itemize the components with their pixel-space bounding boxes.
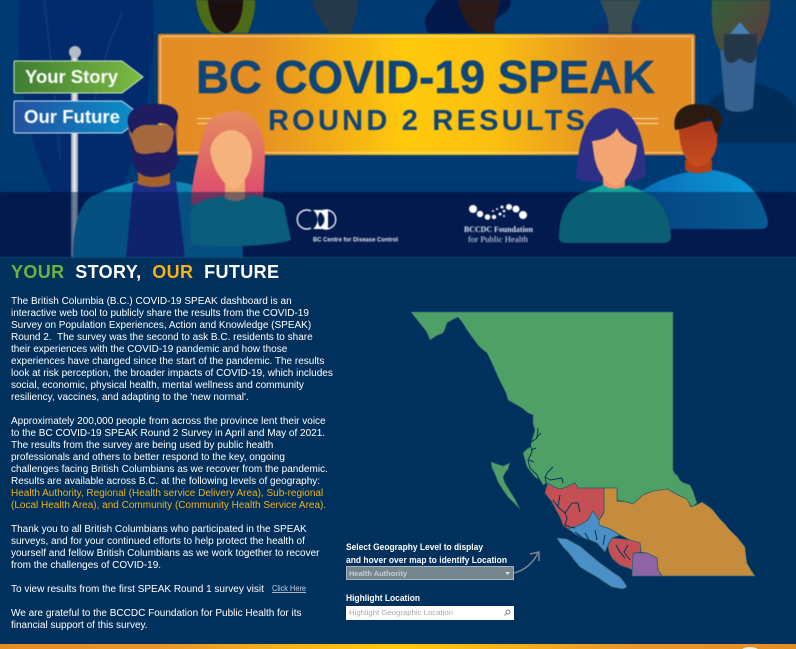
region: Vancouver Coastal mainland south bbox=[568, 511, 620, 552]
main title board bbox=[158, 34, 695, 155]
map of British Columbia bbox=[411, 312, 755, 589]
intro paragraph: The British Columbia (B.C.) COVID-19 SPEAK dashboard is an bbox=[11, 296, 292, 307]
fjords bbox=[528, 428, 630, 560]
background person: turbaned man bbox=[695, 0, 796, 143]
intro paragraph: interactive web tool to publicly share the results from the COVID-19 bbox=[11, 308, 309, 319]
person: woman with pink hair bbox=[190, 111, 291, 246]
logo: BCCDC Foundation bbox=[464, 204, 534, 244]
participation paragraph: The results from the survey are being used by public health bbox=[11, 440, 273, 451]
footer gradient bar bbox=[0, 644, 796, 649]
search box: Highlight Geographic Location bbox=[349, 608, 453, 617]
round 1 link line: To view results from the first SPEAK Round 1 survey visit bbox=[11, 584, 264, 595]
logo: BCCDC Foundation: BCCDC Foundation bbox=[464, 225, 534, 234]
participation paragraph: Approximately 200,000 people from across the province lent their voice bbox=[11, 416, 326, 427]
participation paragraph: Results are available across B.C. at the following levels of geography: bbox=[11, 476, 320, 487]
subtitle: round 2 results: ROUND 2 RESULTS bbox=[268, 105, 585, 137]
participation paragraph: challenges facing British Columbians as we recover from the pandemic. bbox=[11, 464, 328, 475]
background person: grey with shoulders bbox=[590, 0, 642, 33]
acknowledgement paragraph: financial support of this survey. bbox=[11, 620, 148, 631]
region: Fraser South bbox=[632, 553, 662, 576]
person: bearded man bbox=[73, 104, 243, 258]
background leaves bbox=[18, 0, 154, 226]
participation paragraph bbox=[11, 416, 328, 511]
control label: and hover over map to identify Location bbox=[346, 555, 507, 566]
highlight location control: Highlight Location bbox=[346, 593, 420, 604]
title: BC COVID-19 SPEAK: BC COVID-19 SPEAK bbox=[196, 51, 655, 103]
region: Vancouver Coastal bbox=[545, 483, 604, 529]
intro paragraph: experiences have changed since the start of the pandemic. The results bbox=[11, 356, 324, 367]
participation paragraph: (Local Health Area), and Community (Community Health Service Area). bbox=[11, 500, 326, 511]
heading: your story, our future: YOUR STORY, OUR FUTURE bbox=[11, 262, 279, 282]
region: Vancouver Island bbox=[557, 538, 627, 589]
dropdown: Health Authority bbox=[349, 569, 408, 578]
sign: your story: Your Story bbox=[25, 66, 119, 87]
region: Fraser bbox=[608, 538, 641, 570]
thank you paragraph bbox=[11, 524, 320, 571]
logo: BC Centre for Disease Control bbox=[297, 210, 398, 244]
round 1 link line: Click Here bbox=[272, 583, 306, 593]
sign: our future bbox=[14, 101, 143, 133]
sign: our future: Our Future bbox=[24, 106, 120, 127]
thank you paragraph: yourself and fellow British Columbians as we work together to recover bbox=[11, 548, 320, 559]
background person: dark hair bbox=[425, 0, 511, 33]
person: man in blue shirt bbox=[640, 104, 768, 229]
person: woman with blue hair bbox=[559, 108, 671, 243]
participation paragraph: Health Authority, Regional (Health service Delivery Area), Sub-regional bbox=[11, 488, 323, 499]
intro paragraph: resiliency, vaccines, and adapting to the 'new normal'. bbox=[11, 392, 249, 403]
intro paragraph: Round 2. The survey was the second to ask B.C. residents to share bbox=[11, 332, 313, 343]
CDC mark bbox=[297, 210, 336, 229]
thank you paragraph: Thank you to all British Columbians who participated in the SPEAK bbox=[11, 524, 307, 535]
participation paragraph: professionals and others to better respond to the key, ongoing bbox=[11, 452, 285, 463]
intro paragraph: social, economic, physical health, mental wellness and community bbox=[11, 380, 304, 391]
thank you paragraph: surveys, and for your continued efforts to help protect the health of bbox=[11, 536, 305, 547]
thank you paragraph: from the challenges of COVID-19. bbox=[11, 560, 161, 571]
participation paragraph: to the BC COVID-19 SPEAK Round 2 Survey in April and May of 2021. bbox=[11, 428, 325, 439]
background person: olive hijab bbox=[196, 0, 255, 33]
region: Haida Gwaii bbox=[491, 462, 520, 509]
highlight location control bbox=[346, 593, 514, 620]
region: Northern bbox=[411, 312, 697, 507]
acknowledgement paragraph: We are grateful to the BCCDC Foundation for Public Health for its bbox=[11, 608, 302, 619]
intro paragraph: Survey on Population Experiences, Action and Knowledge (SPEAK) bbox=[11, 320, 311, 331]
logo: BC Centre for Disease Control: BC Centre for Disease Control bbox=[313, 236, 398, 244]
intro paragraph bbox=[11, 296, 333, 403]
geography level control bbox=[346, 542, 514, 580]
control label bbox=[346, 542, 507, 566]
dark band overlay bbox=[0, 192, 796, 258]
pole bbox=[69, 46, 81, 258]
region: Interior bbox=[599, 488, 755, 576]
arrow pointing to map bbox=[514, 552, 539, 573]
banner illustration bbox=[0, 0, 796, 258]
dark band base bbox=[0, 192, 796, 258]
logo: BCCDC Foundation: for Public Health bbox=[468, 235, 528, 244]
dropdown bbox=[346, 566, 514, 580]
control label: Select Geography Level to display bbox=[346, 542, 484, 553]
search box bbox=[346, 606, 514, 620]
intro paragraph: look at risk perception, the broader impacts of COVID-19, which includes bbox=[11, 368, 333, 379]
sign: your story bbox=[14, 61, 143, 93]
intro paragraph: their experiences with the COVID-19 pandemic and how those bbox=[11, 344, 288, 355]
acknowledgement paragraph bbox=[11, 608, 302, 631]
background person: grey bbox=[312, 0, 358, 33]
